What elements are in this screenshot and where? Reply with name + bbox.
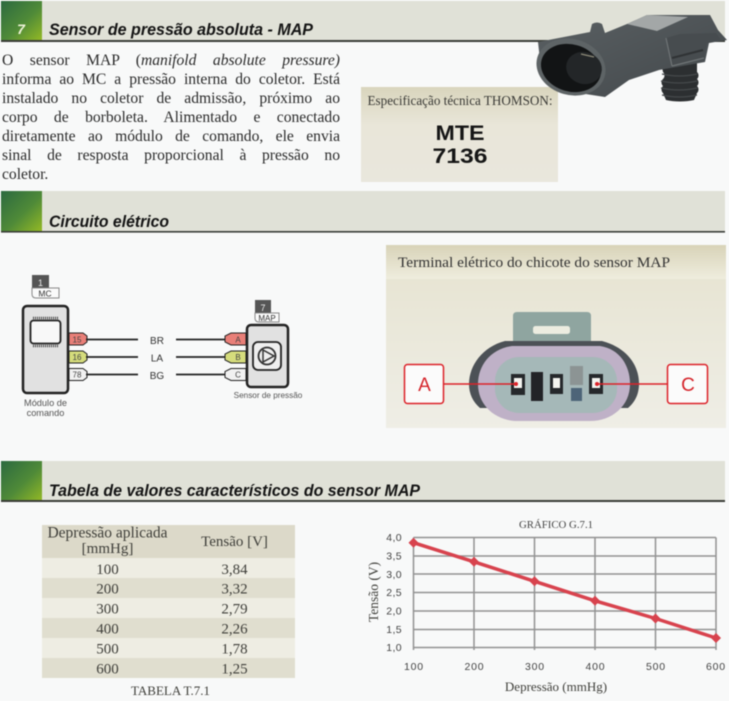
sensor pins: B [235, 353, 241, 362]
table T.7.1: 2,79 [221, 602, 248, 618]
module pins [69, 333, 87, 380]
sensor box [234, 325, 303, 400]
section header: Sensor de pressão absoluta - MAP [1, 1, 725, 42]
section header: Sensor de pressão absoluta - MAP: Sensor de pressão absoluta - MAP [49, 21, 314, 39]
spec panel: THOMSON: MTE [436, 122, 484, 145]
section header: Tabela de valores [1, 461, 725, 502]
intro paragraph: sinal de resposta proporcional à pressão no [2, 147, 340, 164]
data line [408, 538, 721, 643]
wires: BG [150, 371, 164, 382]
intro paragraph: O sensor MAP (manifold absolute pressure) [2, 52, 340, 69]
intro paragraph [2, 52, 340, 183]
x axis labels: 100 [404, 661, 424, 673]
x axis labels: 300 [525, 661, 545, 673]
control module box: Módulo de [24, 398, 67, 408]
y axis labels: 1,5 [386, 624, 402, 636]
chart G.7.1: GRÁFICO G.7.1 [519, 519, 593, 531]
chart G.7.1 [366, 519, 726, 694]
callout: A [404, 364, 518, 404]
module 1 tag: MC [38, 288, 52, 298]
intro paragraph: coletor. [2, 166, 48, 183]
control module box: comando [27, 408, 64, 418]
control module box [23, 306, 68, 418]
table T.7.1: 3,84 [221, 562, 248, 578]
y axis labels: 4,0 [386, 532, 402, 544]
sensor 7 tag: 7 [260, 303, 266, 313]
x axis labels: 600 [706, 661, 726, 673]
table T.7.1: 3,32 [221, 582, 248, 598]
sensor pins: C [235, 370, 241, 380]
spec panel: THOMSON: Especificação técnica THOMSON: [368, 93, 552, 108]
section header: Circuito elétrico: Circuito elétrico [49, 213, 169, 231]
table T.7.1: [mmHg] [82, 541, 133, 557]
section header: Sensor de pressão absoluta - MAP: 7 [17, 21, 26, 37]
circuit diagram [23, 275, 303, 418]
table T.7.1: Tensão [V] [201, 534, 268, 550]
spec panel: THOMSON: 7136 [432, 145, 488, 168]
table T.7.1: Depressão aplicada [47, 524, 168, 542]
table T.7.1: 1,25 [221, 662, 248, 678]
y axis labels: 1,0 [386, 642, 402, 654]
y axis labels [386, 532, 402, 654]
table T.7.1: 500 [96, 642, 119, 658]
module pins: 78 [73, 370, 82, 380]
y axis labels: 3,0 [386, 569, 402, 581]
wires: BR [150, 336, 164, 347]
y axis labels: 3,5 [386, 550, 402, 562]
callout: A: A [418, 375, 431, 396]
wires [86, 336, 228, 382]
y axis labels: 2,0 [386, 606, 402, 618]
intro paragraph: corpo de borboleta. Alimentado e conectado [2, 109, 340, 126]
panel heading: Terminal elétrico do chicote do sensor MAP [398, 255, 670, 271]
x axis labels [404, 661, 726, 673]
section header: Circuito elétrico [1, 191, 725, 233]
table T.7.1: 100 [96, 562, 119, 578]
sensor pins: A [235, 336, 241, 344]
intro paragraph: instalado no coletor de admissão, próximo ao [2, 90, 340, 107]
module pins: 16 [73, 353, 82, 362]
wires: LA [151, 354, 163, 364]
module pins: 15 [73, 336, 82, 344]
icon: MAP sensor photo [530, 15, 727, 104]
table T.7.1: 200 [96, 582, 119, 598]
table T.7.1: 300 [96, 602, 119, 618]
module 1 tag [32, 275, 59, 298]
panel: electrical terminal [386, 245, 726, 428]
sensor 7 tag [255, 300, 279, 323]
grid [414, 538, 716, 650]
chart G.7.1: Tensão (V) [366, 562, 381, 622]
sensor 7 tag: MAP [258, 314, 276, 323]
table T.7.1: 1,78 [221, 642, 248, 658]
sensor box: Sensor de pressão [234, 391, 303, 400]
x axis labels: 200 [465, 661, 484, 673]
intro paragraph: informa ao MC a pressão interna do coletor. Está [2, 71, 340, 88]
sensor pins [225, 333, 246, 380]
panel heading [386, 245, 726, 279]
connector drawing [469, 312, 639, 421]
table T.7.1: TABELA T.7.1 [131, 683, 210, 698]
chart G.7.1: Depressão (mmHg) [505, 679, 607, 694]
x axis labels: 400 [586, 661, 605, 673]
table T.7.1: 400 [96, 622, 119, 638]
intro paragraph: diretamente ao módulo de comando, ele envia [2, 128, 340, 145]
table T.7.1 [42, 524, 295, 698]
y axis labels: 2,5 [386, 587, 402, 599]
x axis labels: 500 [646, 661, 666, 673]
section header: Tabela de valores: Tabela de valores característicos do sensor MAP [49, 482, 421, 500]
spec panel: THOMSON [361, 87, 558, 182]
table T.7.1: 2,26 [221, 622, 248, 638]
table T.7.1: 600 [96, 662, 119, 678]
callout: C [595, 364, 708, 404]
callout: C: C [681, 375, 695, 396]
module 1 tag: 1 [38, 278, 43, 288]
